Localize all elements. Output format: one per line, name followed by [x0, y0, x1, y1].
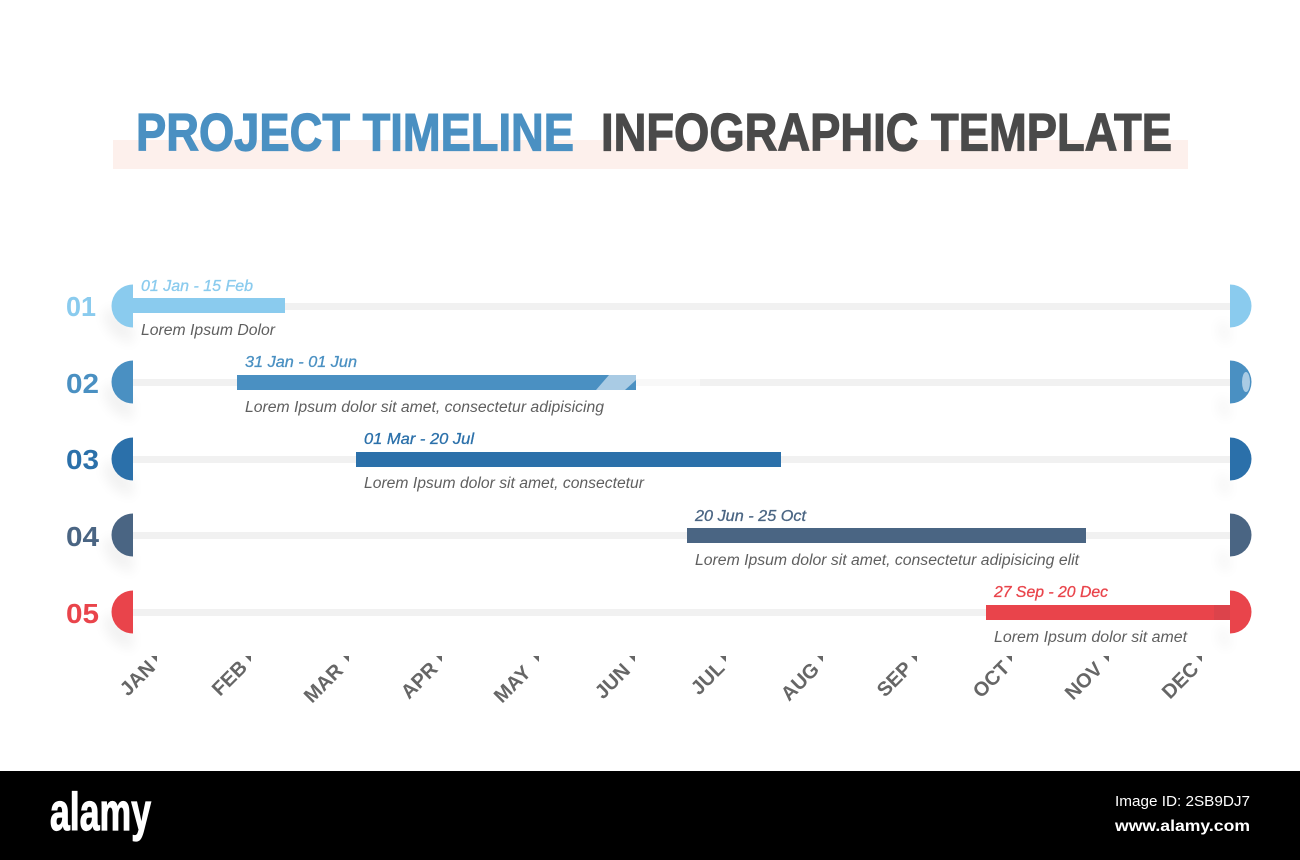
month axis labels: JUN [591, 660, 635, 704]
timeline row 01: 01 Jan - 15 Feb [141, 278, 253, 295]
timeline row 04: Lorem Ipsum dolor sit amet, consectetur adipisicing elit [695, 552, 1080, 569]
timeline row 02: 02 [66, 368, 99, 399]
timeline row 01: Lorem Ipsum Dolor [141, 322, 276, 339]
timeline row 02: Lorem Ipsum dolor sit amet, consectetur adipisicing [245, 399, 604, 416]
timeline row 04 [66, 508, 1252, 574]
month axis labels [116, 656, 1203, 708]
month axis labels: JAN [116, 657, 160, 701]
title [113, 104, 1188, 169]
timeline row 02 [66, 354, 1252, 421]
timeline row 05: 05 [66, 598, 99, 629]
timeline row 03 [66, 431, 1252, 498]
title: PROJECT TIMELINE [136, 104, 574, 162]
timeline row 05: 27 Sep - 20 Dec [993, 584, 1108, 601]
month axis labels: OCT [969, 657, 1014, 703]
timeline row 05: Lorem Ipsum dolor sit amet [994, 629, 1188, 646]
timeline row 01: 01 [66, 291, 96, 322]
month axis labels: JUL [687, 657, 729, 700]
month axis labels: MAY [490, 661, 536, 708]
footer bar [0, 771, 1300, 860]
footer bar: alamy [50, 783, 151, 842]
month axis labels: MAR [300, 659, 348, 708]
month axis labels: SEP [873, 658, 917, 702]
timeline row 01 [66, 278, 1252, 345]
timeline row 03: Lorem Ipsum dolor sit amet, consectetur [364, 475, 645, 492]
timeline row 04: 04 [66, 521, 99, 552]
timeline row 04: 20 Jun - 25 Oct [694, 508, 807, 525]
footer bar: Image ID: 2SB9DJ7 [1115, 793, 1250, 810]
footer bar: www.alamy.com [1114, 818, 1250, 835]
timeline row 03: 03 [66, 444, 99, 475]
timeline row 03: 01 Mar - 20 Jul [364, 431, 474, 448]
month axis labels: DEC [1158, 658, 1203, 704]
month axis labels: FEB [208, 657, 252, 701]
month axis labels: APR [397, 658, 443, 704]
timeline row 05 [66, 584, 1252, 651]
timeline row 02: 31 Jan - 01 Jun [245, 354, 357, 371]
title: INFOGRAPHIC TEMPLATE [601, 104, 1172, 162]
month axis labels: NOV [1061, 658, 1108, 705]
month axis labels: AUG [777, 659, 824, 706]
